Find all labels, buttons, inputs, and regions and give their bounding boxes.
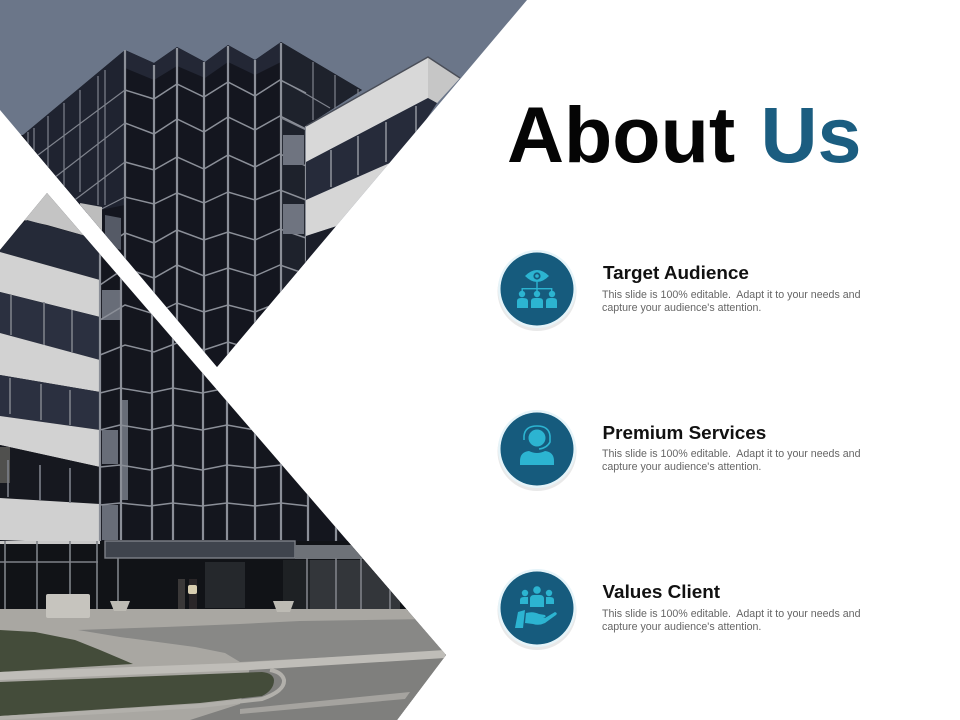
item: values client heading: Values Client: [602, 582, 720, 603]
photo: office building cut into two angular shapes: [0, 0, 527, 720]
photo panel: upper building and sky: [0, 0, 527, 367]
item: target audience icon: [498, 250, 576, 331]
item: values client text: This slide is 100% editable. Adapt it to your needs and capture your audience's attention.: [602, 608, 860, 633]
title accent word: Us: [760, 90, 862, 179]
item: premium services icon: [498, 410, 576, 491]
item: values client icon: [498, 569, 576, 650]
item: target audience text: This slide is 100% editable. Adapt it to your needs and capture your audience's attention.: [602, 288, 860, 314]
title: About: [507, 90, 735, 179]
photo panel: lower building and street: [0, 180, 460, 720]
item: premium services heading: Premium Services: [602, 423, 766, 444]
item: premium services text: This slide is 100% editable. Adapt it to your needs and capture your audience's attention.: [602, 448, 860, 473]
item: target audience heading: Target Audience: [603, 263, 749, 284]
